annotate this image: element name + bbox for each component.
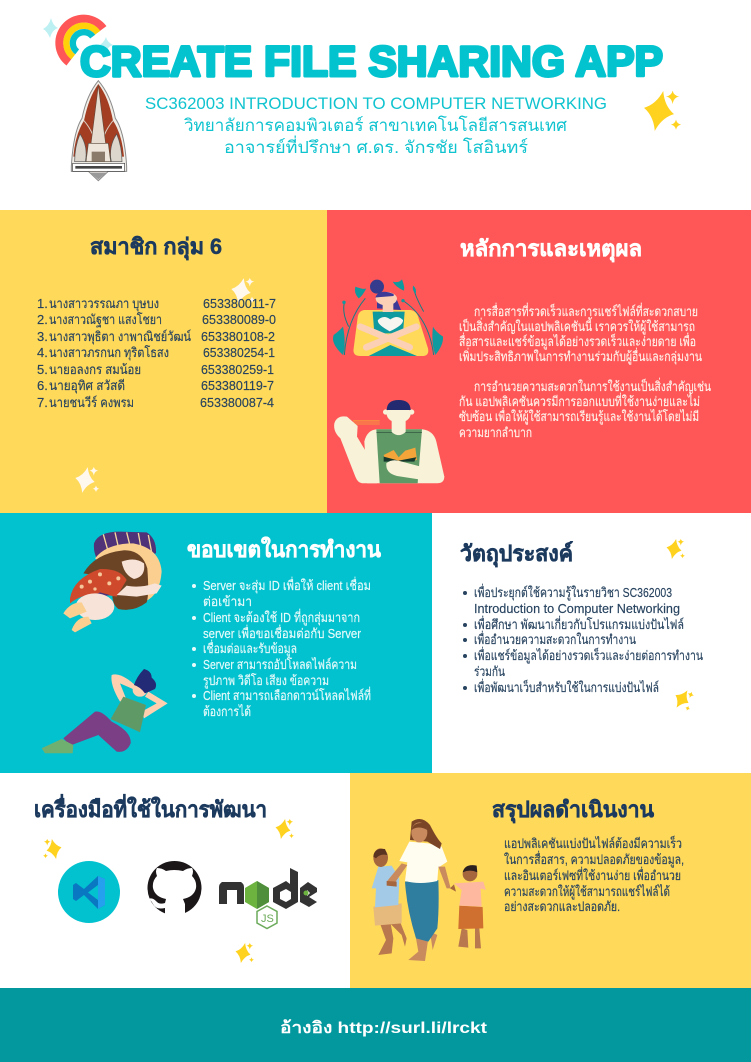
illustration: man lying on back <box>42 669 168 753</box>
member list: 653380108-2 <box>201 329 275 344</box>
illustration: woman hugging pillow <box>63 532 162 632</box>
objectives bullet list: เพื่ออำนวยความสะดวกในการทำงาน <box>474 631 636 647</box>
subtitle: SC362003 INTRODUCTION TO COMPUTER NETWORKING <box>145 94 607 113</box>
panel: members <box>0 210 327 513</box>
objectives bullet list: เพื่อแชร์ข้อมูลได้อย่างรวดเร็วและง่ายต่อการทำงาน <box>474 646 703 664</box>
scope bullet list: เชื่อมต่อและรับข้อมูล <box>203 640 297 657</box>
icon: VS Code logo <box>58 861 120 923</box>
member list: 5. <box>37 362 48 377</box>
member list: 3. <box>37 329 48 344</box>
title: CREATE FILE SHARING APP <box>80 38 663 86</box>
member list: 653380011-7 <box>203 296 276 311</box>
member list: 7. <box>37 395 48 410</box>
illustration: person holding food and chopsticks <box>334 400 444 483</box>
member list: 4. <box>37 345 48 360</box>
conclusion text: และอินเตอร์เฟซที่ใช้งานง่าย เพื่ออำนวย <box>504 867 681 883</box>
heading: scope: ขอบเขตในการทำงาน <box>187 536 381 562</box>
conclusion text <box>504 834 684 914</box>
panel: scope of work <box>0 513 432 773</box>
icon: GitHub logo <box>148 861 202 915</box>
scope bullet list: Server จะสุ่ม ID เพื่อให้ client เชื่อม <box>203 577 371 594</box>
header panel <box>0 0 751 210</box>
scope bullet list: Client จะต้องใช้ ID ที่ถูกสุ่มมาจาก <box>203 609 360 626</box>
member list: 6. <box>37 378 48 393</box>
panel: rationale <box>327 210 751 513</box>
illustration: mother and two children walking <box>372 819 486 961</box>
subtitle: วิทยาลัยการคอมพิวเตอร์ สาขาเทคโนโลยีสารสนเทศ <box>184 115 567 135</box>
scope bullet list: Client สามารถเลือกดาวน์โหลดไฟล์ที่ <box>203 687 371 703</box>
member list: นางสาวพุธิตา งาพาณิชย์วัฒน์ <box>49 329 191 345</box>
scope bullet list: Server สามารถอัปโหลดไฟล์ความ <box>203 657 357 672</box>
panel: objectives <box>432 513 751 773</box>
rationale paragraph 1: การสื่อสารที่รวดเร็วและการแชร์ไฟล์ที่สะดวกสบาย <box>474 302 698 319</box>
conclusion text: ในการสื่อสาร, ความปลอดภัยของข้อมูล, <box>504 851 684 868</box>
objectives bullet list: ร่วมกัน <box>474 664 505 679</box>
member list: นางสาวณัฐชา แสงโชยา <box>49 312 162 328</box>
icon: Node.js logo <box>219 868 317 928</box>
rationale paragraph 1: สื่อสารและแชร์ข้อมูลได้อย่างรวดเร็วและง่ายดาย เพื่อ <box>459 332 696 350</box>
icon: gold sparkle <box>640 88 681 134</box>
heading: members: สมาชิก กลุ่ม 6 <box>90 234 222 261</box>
scope bullet list: ต้องการได้ <box>203 704 251 719</box>
icon: gold sparkles <box>43 817 294 965</box>
scope bullet list: server เพื่อขอเชื่อมต่อกับ Server <box>203 625 362 641</box>
reference link: อ้างอิง http://surl.li/lrckt <box>280 1019 488 1037</box>
objectives bullet list: เพื่อศึกษา พัฒนาเกี่ยวกับโปรแกรมแบ่งปันไฟล์ <box>474 616 684 632</box>
member list: 653380259-1 <box>201 362 274 377</box>
heading: tools: เครื่องมือที่ใช้ในการพัฒนา <box>34 793 267 822</box>
rationale paragraph 2 <box>459 377 711 440</box>
member list: 653380119-7 <box>201 378 274 393</box>
subtitle: อาจารย์ที่ปรึกษา ศ.ดร. จักรชัย โสอินทร์ <box>224 135 528 157</box>
icon: Node.js logo: JS <box>261 913 274 925</box>
illustration: woman with crossed arms and plants <box>333 279 443 356</box>
member list: นางสาววรรณภา บุษบง <box>49 296 159 312</box>
rationale paragraph 2: กัน แอปพลิเคชันควรมีการออกแบบที่ใช้งานง่ายและไม่ <box>459 393 700 409</box>
rationale paragraph 2: ความยากลำบาก <box>459 425 532 440</box>
heading: objectives: วัตถุประสงค์ <box>460 541 573 568</box>
footer panel <box>0 988 751 1062</box>
member list: นายชนวีร์ คงพรม <box>49 395 134 410</box>
member list: นางสาวภรกนก ทุริตโธสง <box>49 345 169 361</box>
icon: gold sparkle lower <box>669 685 696 714</box>
rationale paragraph 1: เป็นสิ่งสำคัญในแอปพลิเคชันนี้ เราควรให้ผู้ใช้สามารถ <box>459 317 695 335</box>
scope bullet list: ต่อเข้ามา <box>203 594 252 609</box>
icon: pale teal sparkles <box>43 18 113 54</box>
member list: 653380254-1 <box>203 345 275 360</box>
conclusion text: อย่างสะดวกและปลอดภัย. <box>504 899 620 914</box>
objectives bullet list: เพื่อพัฒนาเว็บสำหรับใช้ในการแบ่งปันไฟล์ <box>474 678 659 695</box>
member list: 2. <box>37 312 48 327</box>
icon: gold sparkle <box>664 537 685 561</box>
icon: white sparkle lower <box>73 465 99 495</box>
scope bullet list: รูปภาพ วิดีโอ เสียง ข้อความ <box>203 673 329 689</box>
member list: 653380089-0 <box>202 312 276 327</box>
scope bullet list <box>192 577 371 719</box>
member list: 1. <box>37 296 48 311</box>
member list: 653380087-4 <box>200 395 274 410</box>
member list: นายอลงกร สมน้อย <box>49 362 141 377</box>
rationale paragraph 1 <box>459 302 702 365</box>
icon: rainbow <box>59 19 103 62</box>
icon: white sparkle <box>229 276 255 306</box>
panel: development tools <box>0 773 350 988</box>
conclusion text: ความสะดวกให้ผู้ใช้สามารถแชร์ไฟล์ได้ <box>504 884 670 900</box>
member list: นายอุทิศ สวัสดี <box>49 378 125 394</box>
conclusion text: แอปพลิเคชันแบ่งปันไฟล์ต้องมีความเร็ว <box>504 834 682 851</box>
objectives bullet list <box>463 584 703 695</box>
heading: conclusion: สรุปผลดำเนินงาน <box>492 797 654 824</box>
icon: university crest <box>71 81 127 181</box>
objectives bullet list: เพื่อประยุกต์ใช้ความรู้ในรายวิชา SC362003 <box>474 584 672 601</box>
member list <box>37 296 276 410</box>
subtitle <box>145 94 607 157</box>
heading: rationale: หลักการและเหตุผล <box>460 236 642 263</box>
objectives bullet list: Introduction to Computer Networking <box>474 601 680 616</box>
panel: conclusion <box>350 773 751 988</box>
